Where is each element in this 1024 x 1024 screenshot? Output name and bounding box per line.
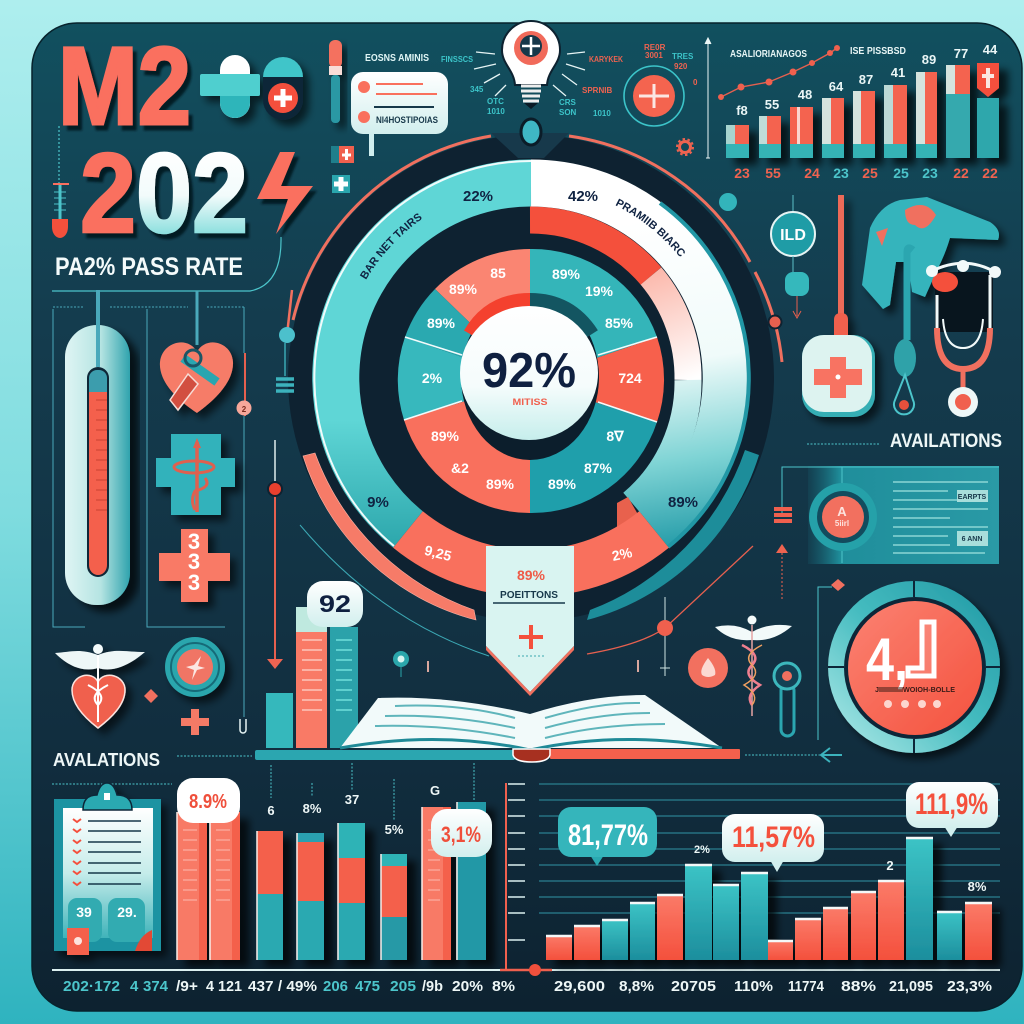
coral hatch patch [617, 497, 640, 530]
dark halo [288, 135, 774, 621]
bar value labels: 48 [798, 87, 812, 102]
coral ring value left: 9,25 [423, 542, 453, 564]
clipboard: 39 [76, 904, 92, 920]
pie values: 2% [422, 370, 443, 386]
grid lines [539, 784, 1000, 913]
bottom left axis labels: 4 121 [206, 978, 242, 995]
icon: gear [677, 139, 693, 155]
heading: availations right: AVAILATIONS [890, 431, 1002, 452]
bottom left axis labels: 475 [355, 978, 380, 995]
bar category labels [734, 165, 998, 181]
coral stack icon [774, 509, 792, 521]
title: M2: M2 [58, 25, 191, 148]
bottom left bar chart [177, 763, 492, 960]
bottom left axis labels: 205 [390, 978, 416, 995]
data card panel: EARPTS [958, 494, 987, 501]
bar value labels: f8 [736, 103, 748, 118]
small labels: 8% [968, 879, 987, 894]
icon: dropper [329, 40, 342, 123]
bar labels: 37 [345, 792, 359, 807]
bar value labels: 44 [983, 42, 998, 57]
ring rims [314, 161, 749, 547]
icon: heart with key [160, 342, 233, 413]
card round badge [809, 483, 877, 551]
icon: round star badge [165, 637, 225, 697]
note bubble: NI4HOSTIPOIAS [376, 115, 438, 126]
icon: coral cross: 3 [188, 529, 200, 554]
pie values: 89% [431, 428, 460, 444]
icon: heart caduceus [55, 644, 145, 728]
gap wedge below bulb [491, 133, 569, 158]
icon: teal medical cross with snake [156, 434, 235, 515]
bar axis labels: 21,095 [889, 978, 933, 995]
dotted rule [807, 443, 880, 445]
bar axis labels: 88% [841, 978, 876, 995]
bar labels: G [430, 783, 440, 798]
bulb callout labels: KARYKEK [589, 55, 623, 64]
outer ring left teal [336, 183, 531, 529]
center tag positions [486, 546, 574, 696]
bubble 111,9% [906, 782, 998, 837]
bubble 8.9%: 8.9% [189, 791, 227, 813]
bar value labels: 55 [765, 97, 779, 112]
small labels: 2 [886, 858, 894, 873]
checklist lines [88, 821, 141, 884]
icons: small crosses [331, 146, 354, 193]
icon: coral diamond [144, 689, 158, 703]
icon: caduceus [715, 616, 792, 716]
pie values: 89% [548, 476, 577, 492]
coral arc node [768, 316, 782, 328]
bubble value 92: 92 [319, 591, 351, 618]
top right bar chart [705, 38, 999, 181]
icon: coral cross [159, 529, 230, 602]
dotted rules [52, 756, 252, 784]
bar axis labels [554, 978, 992, 995]
small labels [694, 844, 987, 894]
bar category labels: 25 [862, 165, 878, 181]
heading: availations bottom left: AVALATIONS [53, 750, 160, 770]
chart axis [705, 38, 711, 158]
open book on shelf [255, 695, 740, 762]
outer ring right white [531, 183, 726, 529]
axis with ticks [506, 783, 525, 970]
bottom left axis labels: 8% [492, 978, 515, 995]
chart heading right: ISE PISSBSD [850, 45, 906, 57]
icon: capsule with cross [263, 57, 303, 120]
card rows [893, 482, 988, 553]
pie values [422, 265, 642, 492]
icon: teal key [774, 663, 800, 736]
bars [177, 802, 486, 960]
icon: medical glove [862, 197, 999, 309]
bar axis labels: 8,8% [619, 978, 654, 995]
bubble 3,1% [431, 809, 492, 857]
bottom left axis labels [63, 978, 515, 995]
icon: plus button [624, 66, 684, 126]
pie values: 89% [449, 281, 478, 297]
subtitle: pass rate: PA2% PASS RATE [55, 253, 243, 281]
pie values: 89% [552, 266, 581, 282]
trend line [718, 45, 840, 100]
bar category labels: 22 [953, 165, 969, 181]
bubble 111,9%: 111,9% [915, 788, 988, 821]
pie values: 87% [584, 460, 613, 476]
chart heading left: ASALIORIANAGOS [730, 48, 807, 60]
baseline [52, 964, 1000, 976]
bulb callout labels: RE0R [644, 43, 666, 52]
bar labels [267, 783, 440, 837]
bulb callout labels: 920 [674, 62, 688, 71]
node dot [657, 620, 673, 636]
arrow up dashed [776, 544, 788, 600]
bar value labels: 64 [829, 79, 844, 94]
pie sectors [398, 249, 664, 513]
coral slider with badge: 2 [242, 405, 247, 414]
arrow into book [745, 748, 842, 762]
bottom left axis labels: 206 [323, 978, 348, 995]
icon: stethoscope [926, 260, 1001, 417]
icon: small pin [240, 719, 246, 733]
ring values [367, 188, 698, 511]
bar value labels: 87 [859, 72, 873, 87]
teal dot [719, 193, 737, 211]
card row labels [957, 490, 988, 502]
bubble 3,1%: 3,1% [441, 822, 481, 847]
clipboard [54, 783, 161, 955]
bar category labels: 23 [922, 165, 938, 181]
bubble 11,57% [722, 814, 824, 872]
bar axis labels: 23,3% [947, 978, 992, 995]
bulb callout labels: 345 [470, 85, 484, 94]
ring values: 22% [463, 188, 493, 205]
bar axis labels: 110% [734, 978, 773, 995]
sun tag [67, 928, 89, 955]
card round badge: 5iirl [835, 519, 849, 528]
center tag positions: 89% [517, 567, 546, 583]
bottom left axis labels: 4 [130, 978, 139, 995]
bar labels: 6 [267, 803, 275, 818]
teal stack connector [276, 290, 295, 391]
pie values: 724 [618, 370, 642, 386]
pie values: 19% [585, 283, 614, 299]
bulb callout labels: 1010 [487, 107, 505, 116]
pie values: 89% [486, 476, 515, 492]
dotted leaders [271, 763, 474, 820]
bar value labels [736, 42, 998, 118]
gauge 4,D [828, 581, 1000, 753]
pie values: 89% [427, 315, 456, 331]
data card panel: 6 ANN [962, 536, 982, 543]
bottom left axis labels: 374 [143, 978, 169, 995]
bar category labels: 25 [893, 165, 909, 181]
bulb callout labels: 3001 [645, 51, 663, 60]
bubble 8.9% [177, 778, 240, 823]
center ring crescents [461, 294, 599, 460]
label: finss: FINSSCS [441, 55, 474, 64]
thin connector arcs [300, 525, 753, 676]
bar category labels: 23 [734, 165, 750, 181]
inner red arc and pale band [530, 220, 688, 503]
bar value labels: 41 [891, 65, 905, 80]
icon: tube with bulb [894, 248, 916, 414]
bulb callout labels: OTC [487, 97, 504, 106]
bulb callout labels [470, 43, 698, 118]
icon: coral cross: 3 [188, 570, 200, 595]
ring curved label right: PRAMIIB BIARC [616, 198, 685, 256]
icon: lightning bolt [257, 152, 313, 234]
center disc value: 92% [482, 344, 576, 398]
pie values: 8∇ [606, 428, 624, 444]
slider with arrow [267, 440, 283, 669]
bubble 81,77% [558, 807, 657, 866]
central donut chart [288, 118, 784, 620]
small ticks [428, 660, 638, 672]
icon: badge with capsule [771, 195, 815, 318]
icon: large thermometer [65, 290, 130, 605]
note bubble [351, 72, 448, 156]
bottom left axis labels: /9+ [176, 978, 198, 995]
ring values: 42% [568, 188, 598, 205]
bar axis labels: 20705 [671, 978, 716, 995]
pie values: 85% [605, 315, 634, 331]
bottom left axis labels: 437 / 49% [248, 978, 317, 995]
bar axis labels: 29,600 [554, 978, 605, 995]
label: top notes: EOSNS AMINIS [365, 53, 429, 64]
coral ring value right: 2% [610, 544, 634, 564]
title: 2024: 202 [80, 130, 248, 256]
bottom left axis labels: 202·172 [63, 978, 120, 995]
card round badge: A [837, 504, 847, 519]
bar category labels: 24 [804, 165, 820, 181]
clipboard: 29. [117, 904, 137, 920]
coral slider with badge [236, 353, 252, 416]
gauge 4,D: 4, [866, 626, 908, 693]
icon: bandaged capsule [200, 55, 260, 118]
icon: first aid kit on stick [802, 195, 875, 417]
bar category labels: 23 [833, 165, 849, 181]
gauge 4,D: JIIIIIIIIIIIIWOIOH-BOLLE [875, 687, 955, 694]
ring values: 89% [668, 494, 698, 511]
bar value labels: 89 [922, 52, 936, 67]
teal dot under bulb [521, 119, 541, 145]
pie values: &2 [451, 460, 469, 476]
bulb callout labels: 1010 [593, 109, 611, 118]
line with diamond [818, 579, 845, 740]
bar labels: 5% [385, 822, 404, 837]
bulb callout labels: SPRNIB [582, 86, 612, 95]
ring curved label left: BAR NET TAIRS [360, 214, 422, 280]
center disc value [460, 306, 598, 440]
bar category labels: 22 [982, 165, 998, 181]
bar axis labels: 11774 [788, 978, 825, 995]
bulb callout labels: CRS [559, 98, 577, 107]
lower right teal strip [587, 450, 759, 620]
bulb callout labels: TRES [672, 52, 694, 61]
bars [546, 837, 992, 960]
bottom right bar chart [506, 782, 1000, 995]
icon: small gauge thermometer [52, 183, 69, 238]
bubble value 92 [307, 581, 363, 627]
small labels: 2% [694, 844, 710, 856]
check marks [73, 819, 81, 885]
bar category labels: 55 [765, 165, 781, 181]
small pin [393, 651, 409, 677]
bulb callout labels: 0 [693, 78, 698, 87]
outer thin arcs and teal stud [293, 136, 782, 362]
center small bar chart [266, 581, 363, 748]
bulb callout labels: SON [559, 108, 577, 117]
ring values: 9% [367, 494, 389, 511]
icon: coral cross: 3 [188, 549, 200, 574]
bars [726, 63, 999, 158]
connector lines under title [52, 126, 281, 367]
icon: coral round drop [688, 648, 728, 688]
pie values: 85 [490, 265, 506, 281]
bubble 81,77%: 81,77% [568, 819, 648, 852]
center tag positions: POEITTONS [500, 589, 558, 601]
stat boxes [68, 898, 102, 942]
icon: lightbulb with rays [474, 21, 585, 109]
bar value labels: 77 [954, 46, 968, 61]
icon: badge with capsule: ILD [780, 227, 806, 244]
bottom left axis labels: /9b [422, 978, 443, 995]
frame lines left [53, 307, 245, 717]
bubble 11,57%: 11,57% [732, 821, 815, 854]
ring coral bottom segment [408, 530, 654, 573]
bar labels: 8% [303, 801, 322, 816]
icon: coral plus [181, 709, 209, 735]
bottom left axis labels: 20% [452, 978, 483, 995]
data card panel [782, 466, 999, 564]
center disc value: MITISS [512, 397, 548, 407]
lower left coral strip [303, 453, 476, 620]
